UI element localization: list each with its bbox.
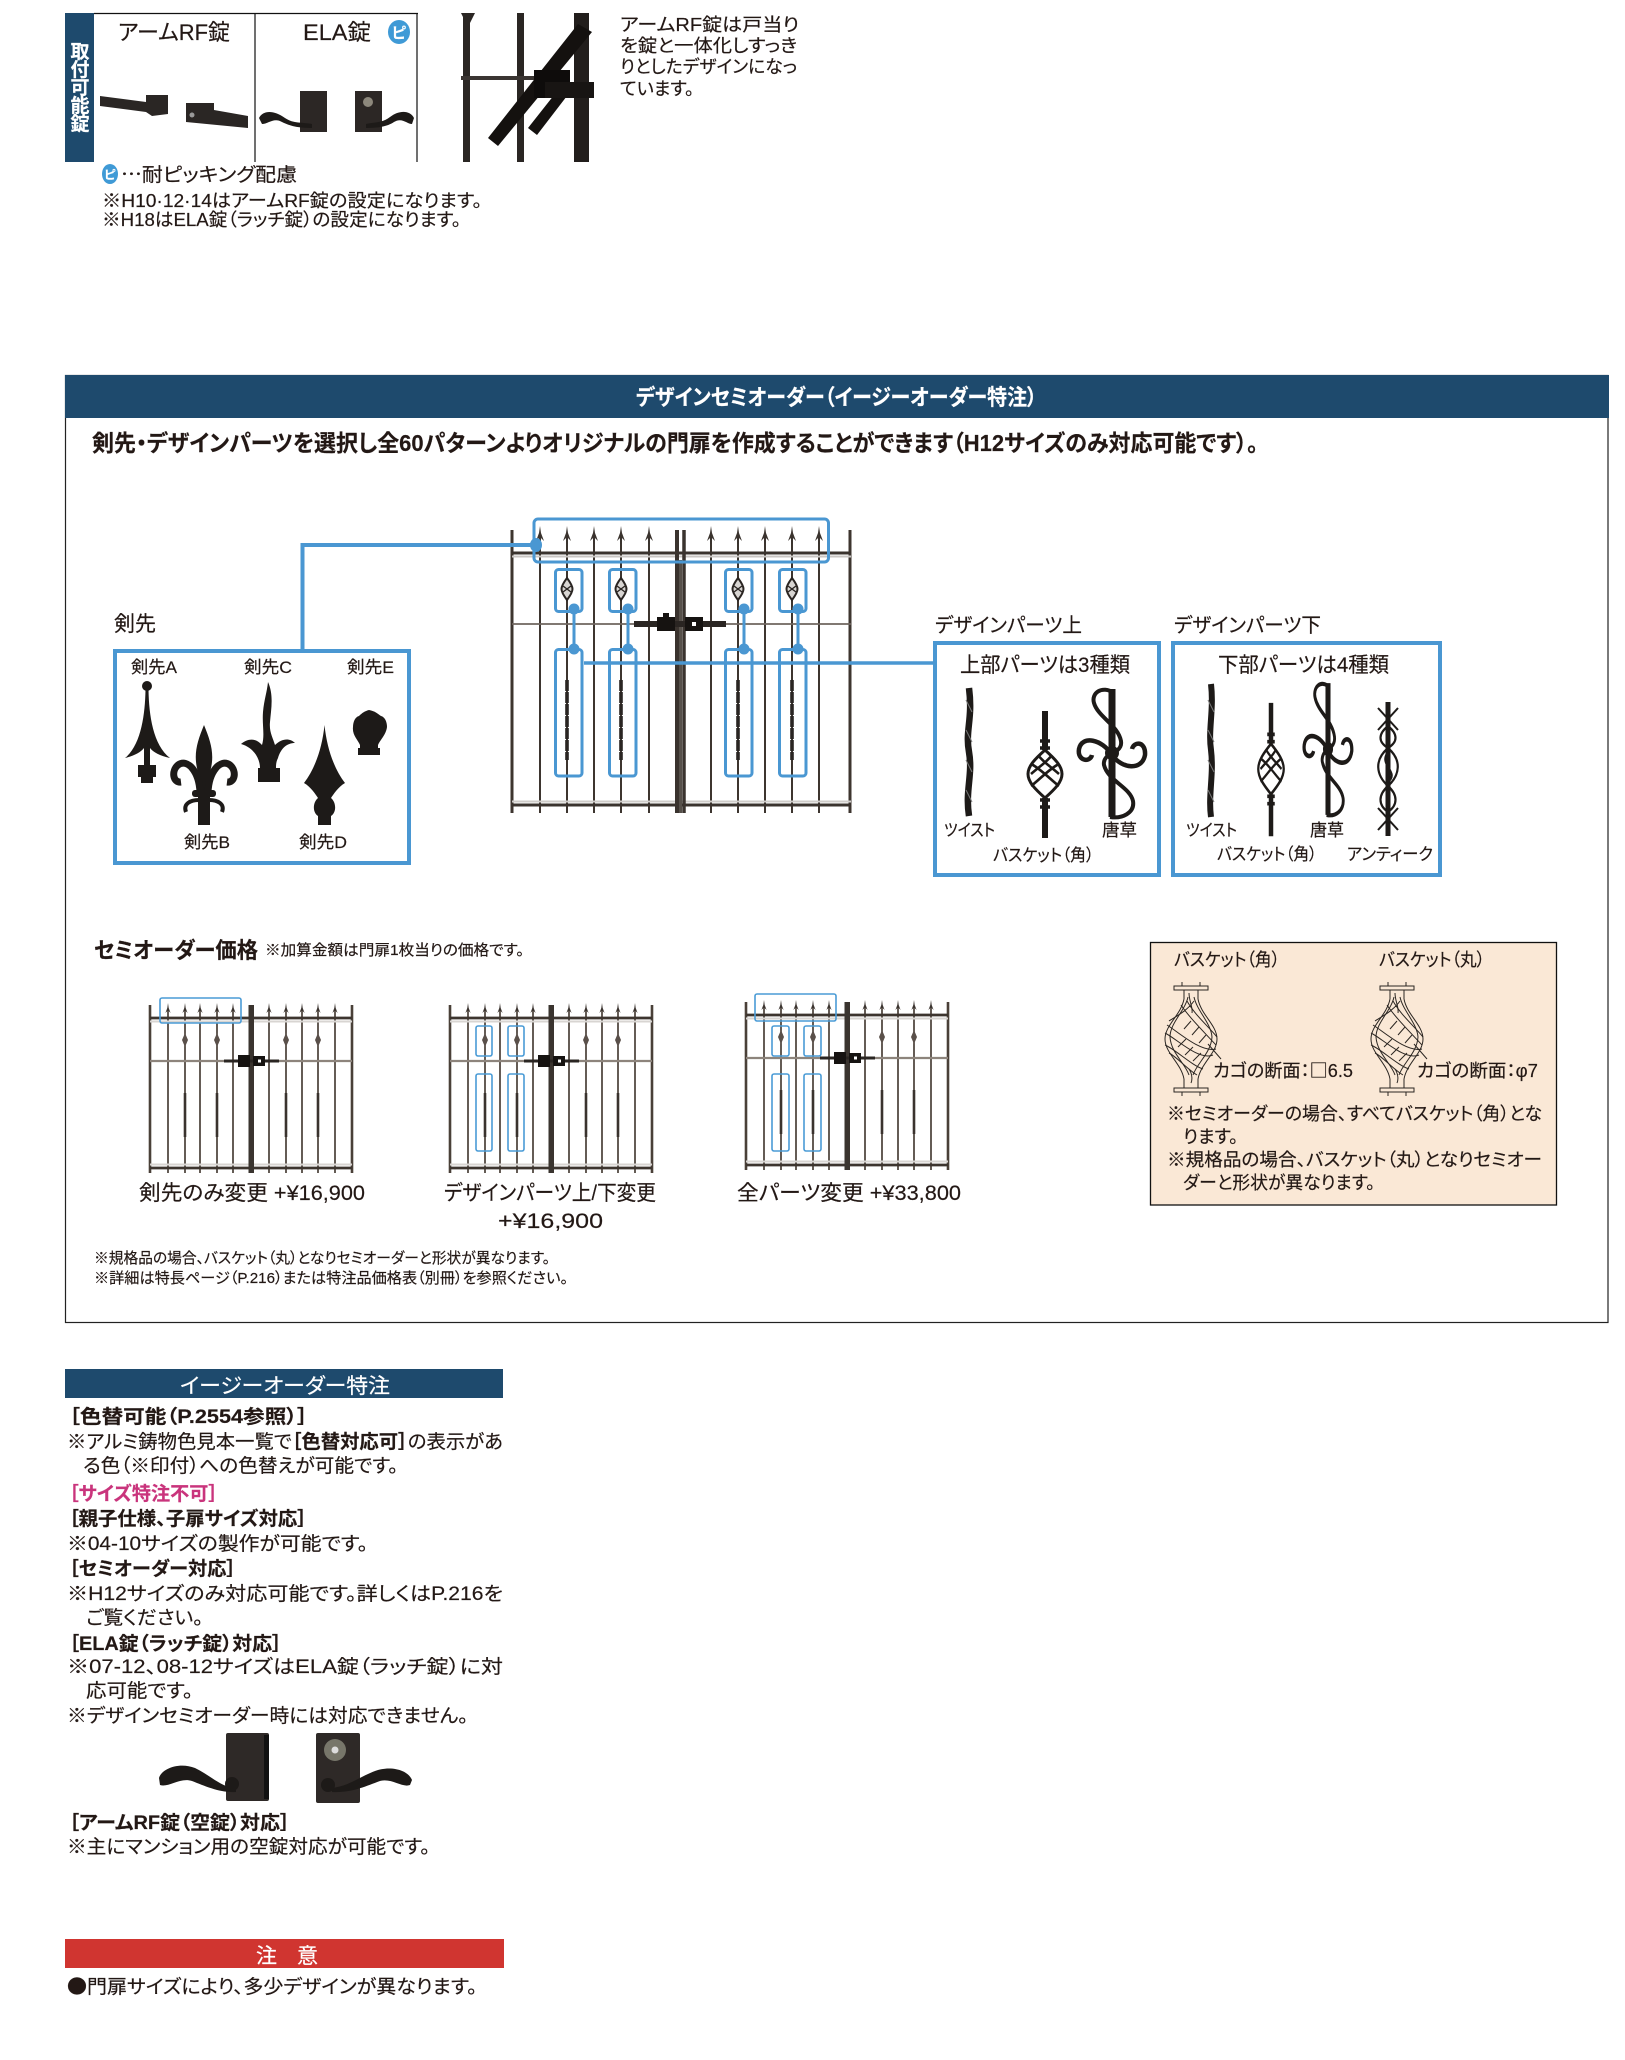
text: basket notes: ※規格品の場合、バスケット（丸）となりセミオー: [1167, 1150, 1542, 1170]
arrow: connector to spear tips: [302, 538, 542, 651]
text: upper part labels: 唐草: [1102, 821, 1137, 840]
chart: main gate diagram: [512, 526, 851, 813]
heading: upper parts count: 上部パーツは3種類: [960, 654, 1130, 677]
text: lock notes: ピ: [104, 168, 116, 182]
text: square section: カゴの断面：□6.5: [1213, 1057, 1353, 1083]
icon: spear B fleur-de-lis: [174, 725, 234, 825]
heading: ELA lock: ELA錠: [303, 20, 371, 45]
text: lock notes: ※H18はELA錠（ラッチ錠）の設定になります。: [102, 210, 461, 230]
text: spear labels: 剣先A: [131, 658, 178, 677]
text: upper part labels: バスケット（角）: [993, 846, 1094, 865]
heading: lower parts count: 下部パーツは4種類: [1218, 654, 1389, 677]
text: semi-order support: ご覧ください。: [86, 1607, 203, 1629]
panel: upper parts: [935, 643, 1159, 875]
text: arm RF lock description: りとしたデザインになっ: [620, 57, 797, 77]
text: parent and child spec: ［親子仕様、子扉サイズ対応］: [69, 1507, 307, 1530]
text: footnotes: ※規格品の場合、バスケット（丸）となりセミオーダーと形状が異なります。: [94, 1250, 550, 1267]
icon: twist part: [966, 688, 972, 816]
panel: spear tips: [115, 651, 409, 863]
panel: design semi-order: [65, 375, 1609, 1322]
text: upper part labels: [944, 821, 1137, 865]
panel: lower parts: [1173, 643, 1440, 875]
panel: basket comparison: [1150, 942, 1556, 1205]
vertical label strip: 能: [70, 95, 90, 117]
text: lock notes: [102, 160, 482, 230]
icon: arabesque part: [1079, 689, 1145, 817]
text: price all parts: 全パーツ変更 +¥33,800: [737, 1182, 961, 1205]
text: lower part labels: [1186, 821, 1433, 864]
text: price note: ※加算金額は門扉1枚当りの価格です。: [265, 941, 524, 959]
caution header bar: 注 意: [256, 1945, 318, 1968]
text: price design parts: デザインパーツ上/下変更: [444, 1182, 656, 1205]
icon: ELA lever handles: [259, 91, 414, 132]
text: arm RF lock support: ※主にマンション用の空錠対応が可能です。: [67, 1836, 430, 1858]
icon: spear A: [125, 681, 170, 783]
icon: basket part: [1258, 703, 1284, 836]
text: caution note: ●門扉サイズにより、多少デザインが異なります。: [67, 1972, 477, 1999]
arrow: connectors to design parts: [568, 604, 934, 663]
text: price design parts: +¥16,900: [498, 1210, 603, 1233]
text: parent and child spec: ※04-10サイズの製作が可能です。: [67, 1533, 368, 1555]
text: lower part labels: アンティーク: [1347, 845, 1433, 864]
icon: basket round line drawing: [1371, 982, 1427, 1096]
text: color change: ※アルミ鋳物色見本一覧で［色替対応可］の表示があ: [67, 1431, 503, 1453]
text: basket notes: ります。: [1183, 1127, 1238, 1147]
text: spear labels: 剣先D: [299, 833, 347, 852]
panel: easy order: [65, 1369, 503, 1858]
icon: basket square line drawing: [1165, 982, 1221, 1096]
text: color change: る色（※印付）への色替えが可能です。: [83, 1455, 398, 1477]
heading: basket square: バスケット（角）: [1174, 950, 1280, 970]
text: ELA lock support: ※07-12、08-12サイズはELA錠（ラッチ錠）に対: [67, 1656, 503, 1678]
text: color change: [67, 1406, 503, 1477]
text: round section: カゴの断面：φ7: [1417, 1061, 1538, 1081]
text: arm RF lock description: を錠と一体化しすっき: [620, 36, 797, 56]
heading: design parts upper: デザインパーツ上: [935, 614, 1082, 637]
text: price design parts: [444, 1182, 656, 1233]
header bar: [65, 1369, 503, 1398]
text: basket notes: ダーと形状が異なります。: [1183, 1173, 1375, 1193]
photo: arm RF lock mounted on gate: [461, 13, 594, 162]
text: ELA lock support: ［ELA錠（ラッチ錠）対応］: [69, 1633, 282, 1655]
text: basket notes: ※セミオーダーの場合、すべてバスケット（角）とな: [1167, 1104, 1542, 1124]
heading: design parts lower: デザインパーツ下: [1174, 614, 1321, 637]
text: lower part labels: 唐草: [1310, 821, 1344, 840]
icon: spear D: [304, 725, 345, 825]
callout: blue highlight boxes on main gate: [534, 519, 828, 776]
text: ELA lock support: 応可能です。: [86, 1680, 193, 1702]
icon: spear C flame: [241, 682, 295, 782]
icon: ELA lever lock right: [316, 1733, 412, 1803]
heading: semi-order prices: セミオーダー価格: [94, 938, 258, 963]
intro text: 剣先・デザインパーツを選択し全60パターンよりオリジナルの門扉を作成することができます（H12サイズのみ対応可能です）。: [92, 430, 1258, 456]
text: color change: ［色替可能（P.2554参照）］: [69, 1406, 308, 1428]
text: ELA lock support: ※デザインセミオーダー時には対応できません。: [67, 1705, 468, 1727]
icon: spear E: [353, 710, 387, 755]
panel: caution: [65, 1939, 504, 1999]
text: upper part labels: ツイスト: [944, 821, 995, 840]
text: semi-order support: ※H12サイズのみ対応可能です。詳しくはP.216を: [67, 1583, 503, 1605]
icon: arm RF lever handles: [100, 95, 248, 128]
panel: lockable options: [65, 13, 799, 230]
vertical label strip: 錠: [70, 113, 90, 135]
text: arm RF lock description: ています。: [620, 79, 694, 99]
text: arm RF lock support: ［アームRF錠（空錠）対応］: [69, 1812, 290, 1834]
heading: spear tips: 剣先: [114, 613, 156, 636]
text: spear labels: 剣先B: [184, 833, 230, 852]
header bar: イージーオーダー特注: [180, 1375, 390, 1398]
chart: gate option all parts: [746, 994, 948, 1170]
caution header bar: [65, 1939, 504, 1968]
icon: twist part: [1208, 684, 1214, 817]
vertical label strip: 付: [70, 59, 90, 81]
text: lower part labels: ツイスト: [1186, 821, 1237, 840]
icon: ELA lever lock left: [159, 1733, 269, 1801]
text: parent and child spec: [67, 1507, 368, 1555]
text: ELA lock support: [67, 1633, 503, 1727]
icon: anti-picking badge: [388, 20, 410, 44]
text: spear labels: 剣先E: [347, 658, 394, 677]
text: spear labels: 剣先C: [244, 658, 292, 677]
icon: anti-picking badge: ピ: [392, 25, 407, 42]
text: arm RF lock description: [620, 15, 799, 99]
text: price spear tips only: 剣先のみ変更 +¥16,900: [139, 1182, 365, 1205]
text: spear labels: [131, 658, 394, 852]
icon: basket part: [1028, 711, 1062, 838]
text: arm RF lock description: アームRF錠は戸当り: [620, 15, 799, 35]
text: footnotes: ※詳細は特長ページ（P.216）または特注品価格表（別冊）を参照ください。: [94, 1270, 568, 1287]
chart: gate option design parts: [450, 1003, 652, 1173]
vertical label strip: 取: [70, 42, 90, 63]
icon: antique part: [1378, 702, 1398, 836]
header bar: デザインセミオーダー（イージーオーダー特注）: [636, 385, 1037, 410]
vertical label strip: 可: [70, 78, 90, 99]
header bar: [65, 375, 1609, 418]
text: basket notes: [1167, 1104, 1542, 1193]
chart: gate option spear tips only: [150, 998, 352, 1173]
icon: arabesque part: [1304, 683, 1352, 815]
text: semi-order support: ［セミオーダー対応］: [69, 1557, 236, 1580]
text: size order not available: ［サイズ特注不可］: [69, 1482, 218, 1505]
text: footnotes: [94, 1250, 568, 1287]
text: semi-order support: [67, 1557, 503, 1629]
text: lock notes: ※H10·12·14はアームRF錠の設定になります。: [102, 191, 482, 211]
vertical label strip: [65, 13, 94, 162]
text: arm RF lock support: [67, 1812, 430, 1858]
heading: basket round: バスケット（丸）: [1379, 950, 1485, 970]
text: lower part labels: バスケット（角）: [1217, 845, 1317, 864]
text: lock notes: …耐ピッキング配慮: [121, 160, 297, 187]
heading: arm RF lock: アームRF錠: [118, 20, 230, 45]
